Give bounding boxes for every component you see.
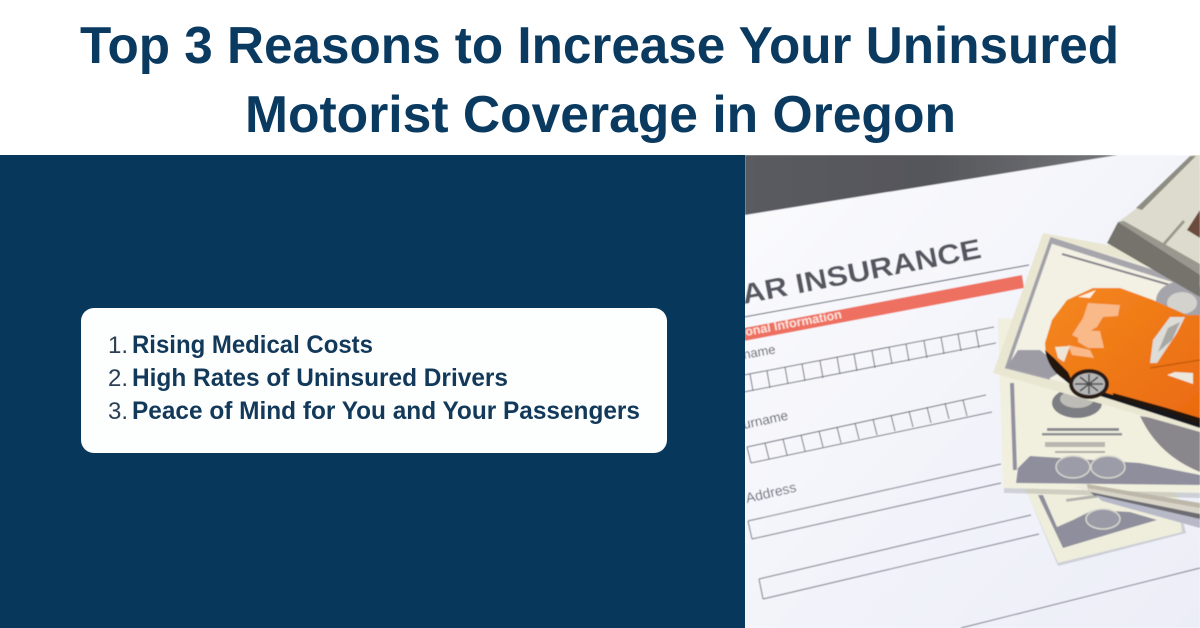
title: Motorist Coverage in Oregon <box>245 86 956 144</box>
field boxes: surname <box>747 395 992 463</box>
reason 2: 2. <box>108 365 128 392</box>
photo: insurance form with money and toy car <box>739 155 1200 628</box>
field boxes: name <box>744 327 996 392</box>
red banner: onal Information <box>744 307 843 339</box>
banknote: lower <box>1025 488 1186 566</box>
car windshield <box>1150 317 1185 363</box>
reason 2: High Rates of Uninsured Drivers <box>132 364 508 392</box>
reason 3: 3. <box>108 398 128 425</box>
reason 1: 1. <box>108 332 128 359</box>
field label: surname: urname <box>742 408 789 432</box>
banknote: upper <box>993 233 1200 432</box>
field boxes: address <box>748 464 1200 628</box>
shadow under car <box>1055 372 1200 428</box>
red banner <box>744 275 1024 341</box>
field label: address: Address <box>744 479 798 506</box>
title <box>80 17 1119 144</box>
banknote: middle <box>998 318 1200 498</box>
title: Top 3 Reasons to Increase Your Uninsured <box>80 17 1119 75</box>
car side window <box>1167 372 1193 384</box>
panel: reasons list <box>81 308 667 453</box>
car hood highlights <box>1068 303 1120 358</box>
reason 1: Rising Medical Costs <box>132 331 373 359</box>
dark desk <box>745 155 1118 215</box>
banknote numerals <box>1056 456 1125 478</box>
pen <box>1075 484 1200 528</box>
reason 3: Peace of Mind for You and Your Passengers <box>132 397 640 425</box>
toy car <box>1045 288 1200 424</box>
calculator <box>1107 155 1200 297</box>
paper form <box>745 155 1200 628</box>
form heading: AR INSURANCE <box>739 233 984 310</box>
car headlight <box>1055 346 1070 362</box>
panel: navy background <box>0 155 745 628</box>
car wheel <box>1069 369 1109 399</box>
field label: name: name <box>742 342 777 362</box>
car door line <box>1150 360 1200 368</box>
